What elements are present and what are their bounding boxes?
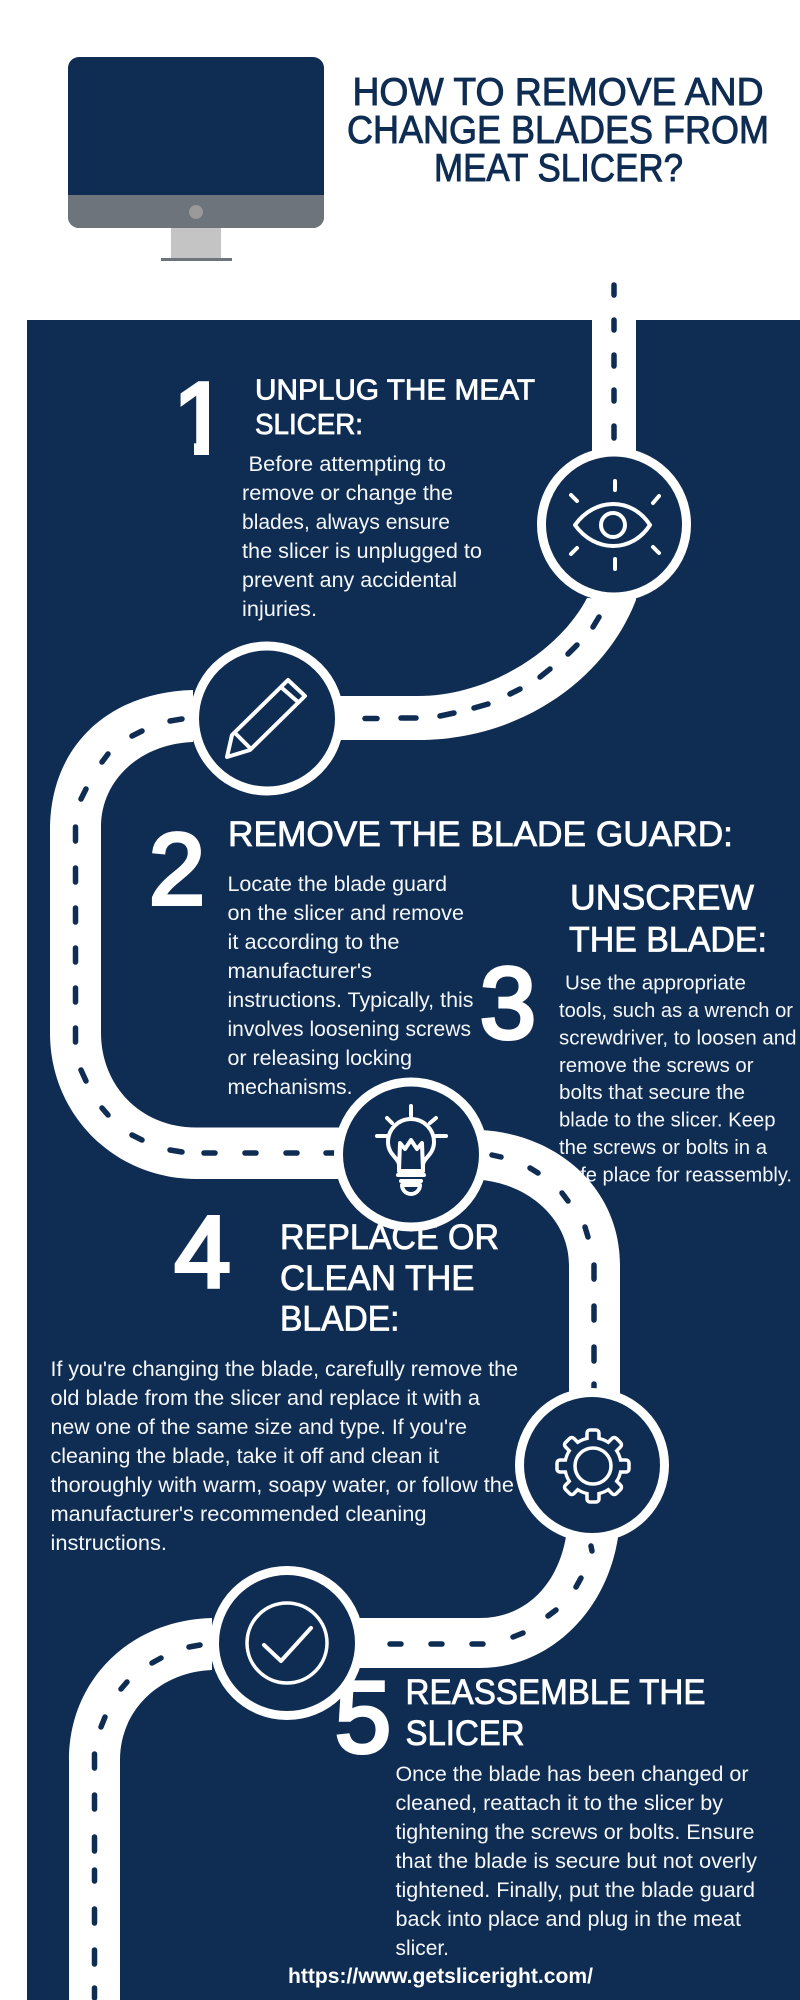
- step 1 text: the slicer is unplugged to: [242, 540, 482, 563]
- step 4 number: 4: [174, 1197, 231, 1309]
- title: CHANGE BLADES FROM: [347, 109, 769, 152]
- step 4 text: [50, 1358, 518, 1555]
- circle node: pencil: [194, 646, 340, 791]
- step 3 block: [480, 878, 796, 1186]
- step 5 heading: SLICER: [406, 1714, 524, 1753]
- step 3 text: bolts that secure the: [559, 1082, 745, 1104]
- step 1 heading: UNPLUG THE MEAT: [255, 374, 535, 406]
- step 4 heading: [280, 1218, 499, 1338]
- step 1 text: injuries.: [242, 598, 317, 621]
- icon: gear: [557, 1430, 629, 1502]
- website link: https://www.getsliceright.com/: [288, 1965, 593, 1988]
- title: [347, 71, 769, 190]
- step 5 text: [396, 1763, 758, 1960]
- step 5 block: [335, 1662, 758, 1960]
- step 3 text: remove the screws or: [559, 1055, 754, 1077]
- step 3 text: Use the appropriate: [565, 972, 746, 994]
- step 1 text: Before attempting to: [248, 453, 446, 476]
- step 3 text: [559, 972, 796, 1186]
- step 1 block: [173, 363, 535, 621]
- step 1 text: remove or change the: [242, 482, 453, 505]
- step 2 number: 2: [149, 814, 205, 926]
- step 2 text: [228, 873, 474, 1099]
- step 2 text: Locate the blade guard: [228, 873, 447, 896]
- step 1 number: 1: [173, 363, 229, 475]
- step 4 block: [50, 1197, 518, 1555]
- title: MEAT SLICER?: [434, 147, 683, 190]
- step 4 text: If you're changing the blade, carefully remove the: [50, 1358, 518, 1381]
- step 3 heading: [569, 878, 767, 960]
- step 4 text: thoroughly with warm, soapy water, or follow the: [50, 1474, 514, 1497]
- step 2 text: on the slicer and remove: [228, 902, 464, 925]
- step 4 text: instructions.: [50, 1532, 167, 1555]
- step 5 text: that the blade is secure but not overly: [396, 1850, 758, 1873]
- icon: desktop monitor: [68, 57, 324, 261]
- step 5 text: back into place and plug in the meat: [396, 1908, 741, 1931]
- step 2 text: manufacturer's: [228, 960, 372, 983]
- step 3 text: screwdriver, to loosen and: [559, 1028, 796, 1050]
- step 3 text: the screws or bolts in a: [559, 1137, 768, 1159]
- step 1 text: prevent any accidental: [242, 569, 457, 592]
- winding road: [50, 285, 636, 2000]
- step 3 number: 3: [480, 948, 536, 1060]
- icon: check mark: [247, 1603, 327, 1683]
- step 3 heading: UNSCREW: [570, 878, 754, 918]
- step 1 text: blades, always ensure: [242, 511, 450, 534]
- title: HOW TO REMOVE AND: [352, 71, 764, 114]
- step 4 heading: BLADE:: [280, 1300, 400, 1338]
- step 5 heading: REASSEMBLE THE: [406, 1673, 706, 1712]
- step 2 text: mechanisms.: [228, 1076, 352, 1099]
- icon: light bulb: [377, 1106, 446, 1194]
- step 4 text: manufacturer's recommended cleaning: [50, 1503, 426, 1526]
- step 4 text: new one of the same size and type. If you're: [50, 1416, 467, 1439]
- step 4 heading: CLEAN THE: [280, 1259, 474, 1298]
- step 5 number: 5: [335, 1662, 391, 1774]
- step 3 text: blade to the slicer. Keep: [559, 1110, 776, 1132]
- icon: pencil: [227, 680, 305, 757]
- step 4 heading: REPLACE OR: [280, 1218, 499, 1257]
- circle node: check mark: [214, 1570, 360, 1716]
- step 3 heading: THE BLADE:: [569, 920, 767, 960]
- step 2 text: involves loosening screws: [228, 1018, 471, 1041]
- step 5 text: tightening the screws or bolts. Ensure: [396, 1821, 754, 1844]
- step 2 block: [149, 814, 733, 1099]
- step 2 text: it according to the: [228, 931, 400, 954]
- step 1 heading: [255, 374, 535, 441]
- step 5 text: tightened. Finally, put the blade guard: [396, 1879, 755, 1902]
- road dashes: [76, 285, 614, 1998]
- step 4 text: cleaning the blade, take it off and clean it: [50, 1445, 439, 1468]
- step 1 text: [242, 453, 482, 621]
- step 5 heading: [406, 1673, 706, 1753]
- circle node: gear: [520, 1392, 664, 1538]
- step 5 text: Once the blade has been changed or: [396, 1763, 748, 1786]
- icon: eye: [571, 481, 659, 569]
- step 4 text: old blade from the slicer and replace it with a: [50, 1387, 480, 1410]
- step 5 text: slicer.: [396, 1937, 449, 1960]
- circle node: eye: [542, 452, 686, 597]
- step 2 text: instructions. Typically, this: [228, 989, 474, 1012]
- step 3 text: safe place for reassembly.: [559, 1164, 792, 1186]
- circle node: light bulb: [338, 1082, 484, 1227]
- step 1 heading: SLICER:: [255, 409, 363, 441]
- step 2 text: or releasing locking: [228, 1047, 412, 1070]
- step 5 text: cleaned, reattach it to the slicer by: [396, 1792, 724, 1815]
- step 3 text: tools, such as a wrench or: [559, 1000, 793, 1022]
- step 2 heading: REMOVE THE BLADE GUARD:: [228, 815, 733, 854]
